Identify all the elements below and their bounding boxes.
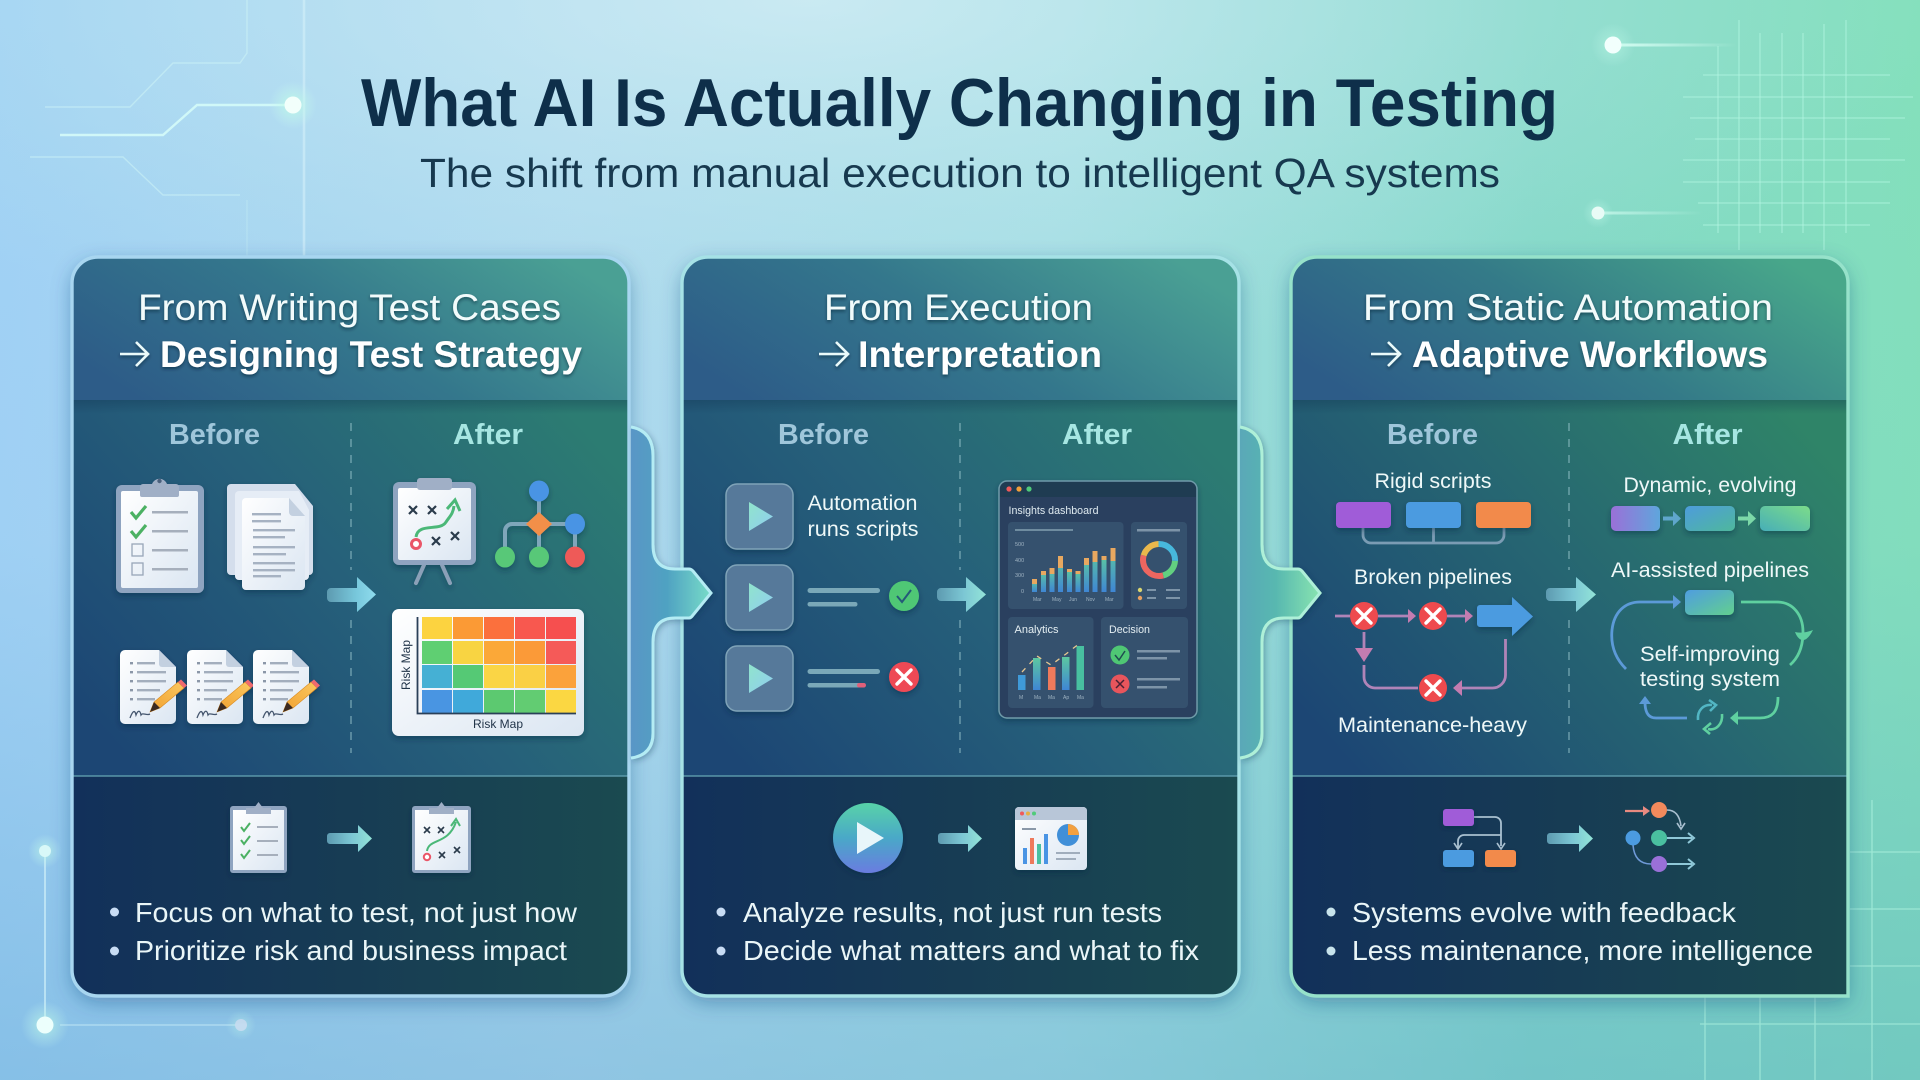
rigid scripts diagram [1336,502,1531,543]
self-improving label: testing system [1640,667,1780,691]
footer arrow [938,825,982,852]
connector arrow: panel 1 to panel 2 [631,427,711,758]
panel 3 bullets [1326,897,1813,966]
self-improving loop diagram [1612,590,1813,734]
fail result row [808,662,919,692]
dynamic workflow diagram [1611,506,1810,531]
icon: checklist clipboard [116,479,204,593]
ai-assisted pipelines label: AI-assisted pipelines [1611,558,1809,582]
icon: refresh cycle [1698,700,1722,734]
panel 1 heading [120,287,582,375]
panel 2 bullets: Decide what matters and what to fix [743,935,1199,966]
panel 1 heading: From Writing Test Cases [138,287,561,328]
dashboard decision card [1101,617,1188,708]
panel 2 heading: From Execution [824,287,1093,328]
automation label: runs scripts [808,517,918,541]
dashboard analytics card: Ma [1034,695,1041,701]
panel 3 after label: After [1672,419,1742,451]
panel 2 heading [819,287,1102,375]
self-improving label: Self-improving [1640,642,1780,666]
automation label [808,491,918,541]
dashboard bar chart card [1008,522,1124,609]
dashboard analytics card: M [1019,695,1023,701]
panel 1 after label: After [453,419,523,451]
dashboard analytics card: Ma [1077,695,1084,701]
risk map heatmap [392,609,584,736]
arrow: before to after [937,577,986,612]
risk map heatmap: Risk Map [399,640,413,690]
footer icon: report dashboard [1015,807,1087,870]
panel 1 heading: Designing Test Strategy [160,334,582,375]
panel 3 heading: Adaptive Workflows [1412,334,1768,375]
subtitle: The shift from manual execution to intelligent QA systems [420,150,1500,196]
panel 3 heading: From Static Automation [1363,287,1773,328]
dashboard donut card [1131,522,1187,609]
rigid scripts label: Rigid scripts [1374,469,1492,493]
dashboard analytics card: Ap [1063,695,1069,701]
footer icon: strategy board [412,802,471,873]
panel 1 before label: Before [169,419,260,451]
connector arrow: panel 2 to panel 3 [1240,427,1320,758]
dashboard bar chart card: 400 [1015,558,1024,564]
arrow: before to after [1546,577,1596,612]
footer icon: checklist [230,802,287,873]
panel 2 heading: Interpretation [858,334,1102,375]
panel 2 before label: Before [778,419,869,451]
pass result row [808,581,919,611]
maintenance-heavy label: Maintenance-heavy [1338,713,1527,737]
dashboard bar chart card: 0 [1021,589,1024,595]
footer icon: play button [833,803,903,873]
insights dashboard: Insights dashboard [1008,505,1098,517]
dashboard analytics card [1008,617,1094,708]
icon: play tile 1 [726,484,793,549]
dashboard bar chart card: Mar [1105,597,1114,603]
panel 3 bullets: Systems evolve with feedback [1352,897,1736,928]
broken pipelines label: Broken pipelines [1354,565,1512,589]
panel 3 before label: Before [1387,419,1478,451]
dynamic evolving label: Dynamic, evolving [1624,473,1796,497]
broken pipeline diagram [1335,597,1533,702]
insights dashboard [999,481,1197,718]
footer icon: rigid flow [1443,809,1516,867]
footer arrow [1547,825,1593,852]
icon: play tile 3 [726,646,793,711]
footer icon: adaptive flow [1625,802,1694,872]
icon: document stack [227,484,313,590]
dashboard bar chart card: Nov [1086,597,1095,603]
panel 2 bullets: Analyze results, not just run tests [743,897,1162,928]
arrow: before to after [327,577,376,612]
dashboard bar chart card: 500 [1015,542,1024,548]
dashboard bar chart card: May [1052,597,1062,603]
dashboard decision card: Decision [1109,624,1150,636]
icon: play tile 2 [726,565,793,630]
dashboard bar chart card: Mar [1033,597,1042,603]
dashboard analytics card: Analytics [1014,624,1059,636]
dashboard bar chart card: 300 [1015,573,1024,579]
panel: from writing test cases [72,257,629,996]
icon: signed documents [120,650,320,724]
dashboard bar chart card: Jun [1069,597,1077,603]
panel 1 bullets: Prioritize risk and business impact [135,935,567,966]
risk map heatmap: Risk Map [473,717,523,731]
dashboard analytics card: Ma [1048,695,1055,701]
footer arrow [327,825,372,852]
automation label: Automation [808,491,918,515]
panel 1 bullets: Focus on what to test, not just how [135,897,577,928]
panel 2 bullets [716,897,1199,966]
panel 2 after label: After [1062,419,1132,451]
panel 3 heading [1363,287,1773,375]
panel: from execution [682,257,1239,996]
title: What AI Is Actually Changing in Testing [361,65,1558,141]
icon: decision tree [495,480,585,568]
icon: strategy board [393,478,476,583]
panel 1 bullets [110,897,577,966]
panel 3 bullets: Less maintenance, more intelligence [1352,935,1813,966]
self-improving label [1640,642,1780,691]
panel: from static automation [1291,257,1848,996]
